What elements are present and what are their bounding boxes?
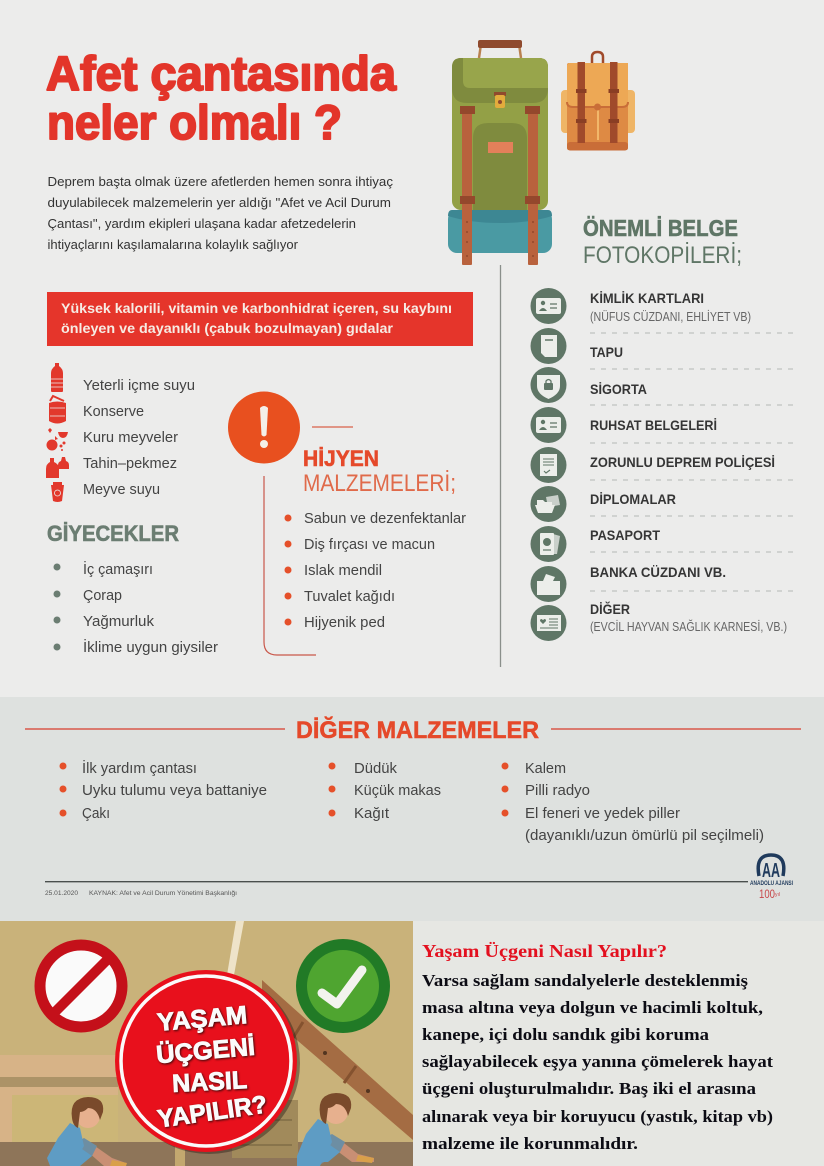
panel: other supplies: Pilli radyo [525,783,590,799]
heading: important documents: FOTOKOPİLERİ; [583,242,742,269]
title: Afet çantasında [46,48,396,101]
icon: title deed [530,328,566,364]
panel: life triangle text: masa altına veya dolgun ve hacimli koltuk, [422,998,763,1017]
intro text block: duyulabilecek malzemelerin yer aldığı "Afet ve Acil Durum [48,195,391,210]
icon: green check sign [296,939,390,1033]
footer source line: KAYNAK: Afet ve Acil Durum Yönetimi Başkanlığı [89,891,237,897]
panel: other supplies: Düdük [354,761,398,777]
panel: other supplies: Çakı [82,806,110,822]
heading: important documents [583,215,742,269]
badge: red circle heading: YAPILIR? [156,1090,269,1133]
food banner: Yüksek kalorili, vitamin ve karbonhidrat içeren, su kaybını [61,301,452,316]
panel: life triangle text: alınarak veya bir koruyucu (yastık, kitap vb) [422,1107,773,1126]
icon: tin can [49,396,66,424]
documents list: (NÜFUS CÜZDANI, EHLİYET VB) [590,310,751,324]
panel: other supplies: İlk yardım çantası [82,759,197,777]
food list [46,363,195,502]
panel: other supplies: (dayanıklı/uzun ömürlü pil seçilmeli) [525,828,764,844]
panel: other supplies: Küçük makas [354,783,441,799]
icon: juice cup [51,482,64,502]
hygiene section: Tuvalet kağıdı [304,589,395,605]
clothes section: İklime uygun giysiler [83,638,218,656]
illustration: small orange backpack [561,52,635,150]
documents list: DİĞER [590,600,630,617]
food list: Kuru meyveler [83,430,178,446]
icon: bank book [530,566,566,602]
icon: passport [530,526,566,562]
clothes section: GİYECEKLER [47,521,179,546]
title: neler olmalı ? [47,97,342,150]
hygiene section: HİJYEN [303,446,379,471]
icon: exclamation mark [228,392,300,464]
documents list: RUHSAT BELGELERİ [590,417,717,433]
illustration: large green backpack [448,40,552,265]
icon: pet health card [530,605,566,641]
food banner [47,292,473,346]
logo: Anadolu Ajansi: 100 [759,887,775,901]
title [46,48,396,150]
intro text block: Deprem başta olmak üzere afetlerden hemen sonra ihtiyaç [48,174,393,189]
documents list: (EVCİL HAYVAN SAĞLIK KARNESİ, VB.) [590,619,787,634]
intro text block: ihtiyaçlarını kaşılamalarına kolaylık sağlıyor [48,237,299,252]
documents list [530,288,796,641]
clothes section: Çorap [83,588,122,604]
badge: red circle heading: NASIL [171,1066,248,1098]
food list: Konserve [83,404,144,420]
panel: other supplies: DİĞER MALZEMELER [296,716,539,744]
icon: insurance shield [530,367,566,403]
panel: other supplies: Uyku tulumu veya battaniye [82,783,267,799]
hygiene section: Sabun ve dezenfektanlar [304,511,466,527]
badge: red circle heading: YAŞAM [156,1001,248,1037]
hygiene section: MALZEMELERİ; [303,470,456,497]
logo: Anadolu Ajansi: yıl [775,892,780,898]
panel: life triangle text: Varsa sağlam sandalyelerle desteklenmiş [422,971,748,990]
intro text block [48,174,393,252]
footer source line: 25.01.2020 [45,891,79,897]
documents list: TAPU [590,344,623,360]
documents list: ZORUNLU DEPREM POLİÇESİ [590,454,775,470]
documents list: PASAPORT [590,527,660,543]
icon: licence card [530,407,566,443]
documents list: SİGORTA [590,381,647,397]
panel: life triangle text: kanepe, içi dolu sandık gibi koruma [422,1025,710,1044]
icon: dried fruits [46,428,68,451]
food list: Meyve suyu [83,482,160,498]
panel: other supplies: El feneri ve yedek piller [525,806,680,822]
panel: other supplies: Kalem [525,761,566,777]
clothes section: İç çamaşırı [83,560,153,578]
documents list: KİMLİK KARTLARI [590,290,704,306]
panel: other supplies [0,697,824,921]
icon: identity card [530,288,566,324]
hygiene section: Islak mendil [304,563,382,579]
heading: important documents: ÖNEMLİ BELGE [583,215,738,241]
panel: life triangle text: sağlayabilecek eşya yanına çömelerek hayat [422,1052,773,1071]
panel: life triangle text [413,921,824,1166]
documents list: DİPLOMALAR [590,491,676,507]
figure: right kneeling person [297,1093,374,1166]
badge: red circle heading [115,970,300,1154]
panel: life triangle text: üçgeni oluşturulmalıdır. Baş iki el arasına [422,1079,757,1098]
icon: tahini and molasses jars [46,457,69,478]
food banner: önleyen ve dayanıklı (çabuk bozulmayan) gıdalar [61,321,394,336]
badge: red circle heading: ÜÇGENİ [155,1032,256,1069]
figure: left kneeling person [47,1097,127,1166]
icon: diplomas folder [530,486,566,522]
logo: Anadolu Ajansi: ANADOLU AJANSI [750,881,793,887]
hygiene section: Diş fırçası ve macun [304,537,435,553]
panel: other supplies: Kağıt [354,806,389,822]
documents list: BANKA CÜZDANI VB. [590,564,726,580]
panel: life triangle text: Yaşam Üçgeni Nasıl Yapılır? [422,941,667,961]
logo: Anadolu Ajansi [750,855,793,901]
clothes section: Yağmurluk [83,614,155,630]
hygiene section [264,427,466,655]
illustration: life triangle [0,921,413,1166]
icon: prohibition sign [40,945,122,1027]
icon: water bottle [51,363,63,392]
logo: Anadolu Ajansi: AA [762,860,780,882]
hygiene section: Hijyenik ped [304,615,385,631]
intro text block: Çantası", yardım ekipleri ulaşana kadar afetzedelerin [48,216,356,231]
icon: earthquake policy [530,447,566,483]
panel: life triangle text: malzeme ile korunmalıdır. [422,1134,638,1153]
clothes section [47,521,218,656]
footer source line [45,882,748,897]
food list: Yeterli içme suyu [83,378,195,394]
food list: Tahin–pekmez [83,456,177,472]
